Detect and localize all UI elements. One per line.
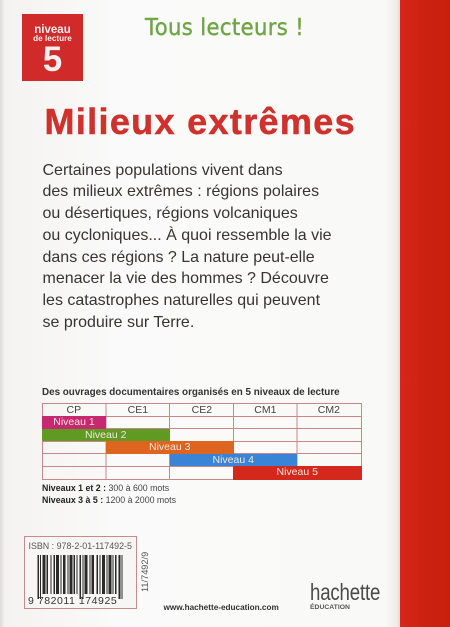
level badge: niveau [34,24,71,36]
column headers: CE1 [128,404,148,416]
chart grid [42,403,362,480]
description text: dans ces régions ? La nature peut-elle [42,249,315,266]
column headers: CM1 [254,404,276,416]
chart heading: Des ouvrages documentaires organisés en 5 niveaux de lecture [42,386,340,398]
description text: ou cycloniques... À quoi ressemble la vie [42,227,332,244]
series label: Tous lecteurs ! [145,15,304,41]
description text: se produire sur Terre. [42,314,194,331]
bar: Niveau 3 [106,441,234,454]
bar: Niveau 5 [233,466,362,480]
barcode digits: 9 782011 174925 [28,594,117,606]
publisher logo: hachette [310,579,380,605]
description text: des milieux extrêmes : régions polaires [42,183,319,200]
title: Milieux extrêmes [44,101,356,142]
bar: Niveau 5: Niveau 5 [277,466,318,478]
column headers [67,404,340,416]
bar: Niveau 4: Niveau 4 [213,454,254,466]
website: www.hachette-education.com [164,602,279,612]
ISBN: ISBN : 978-2-01-117492-5 [28,540,132,550]
red spine band [400,0,450,627]
reading level chart [42,403,362,480]
word counts: Niveaux 3 à 5 : 1200 à 2000 mots [42,495,176,505]
description text: menacer la vie des hommes ? Découvre [42,270,329,287]
level badge: 5 [43,40,62,79]
level badge: de lecture [33,34,72,43]
bar: Niveau 1 [42,416,106,428]
bar: Niveau 3: Niveau 3 [149,441,190,453]
column headers: CM2 [318,404,340,416]
word counts [42,483,176,505]
description text: Certaines populations vivent dans [42,162,283,179]
barcode box [24,536,137,609]
bar: Niveau 4 [170,454,297,466]
level badge [22,14,83,81]
description text: les catastrophes naturelles qui peuvent [42,292,320,309]
word counts: Niveaux 1 et 2 : 300 à 600 mots [42,483,169,493]
description text: ou désertiques, régions volcaniques [42,205,298,222]
column headers: CP [67,404,81,416]
bar: Niveau 2 [42,428,170,441]
bar: Niveau 2: Niveau 2 [85,428,126,440]
column headers: CE2 [192,404,212,416]
description text [42,162,332,331]
print code: 11/7492/9 [140,552,150,592]
publisher logo: ÉDUCATION [310,604,350,611]
bar: Niveau 1: Niveau 1 [53,416,95,428]
barcode [38,555,122,599]
